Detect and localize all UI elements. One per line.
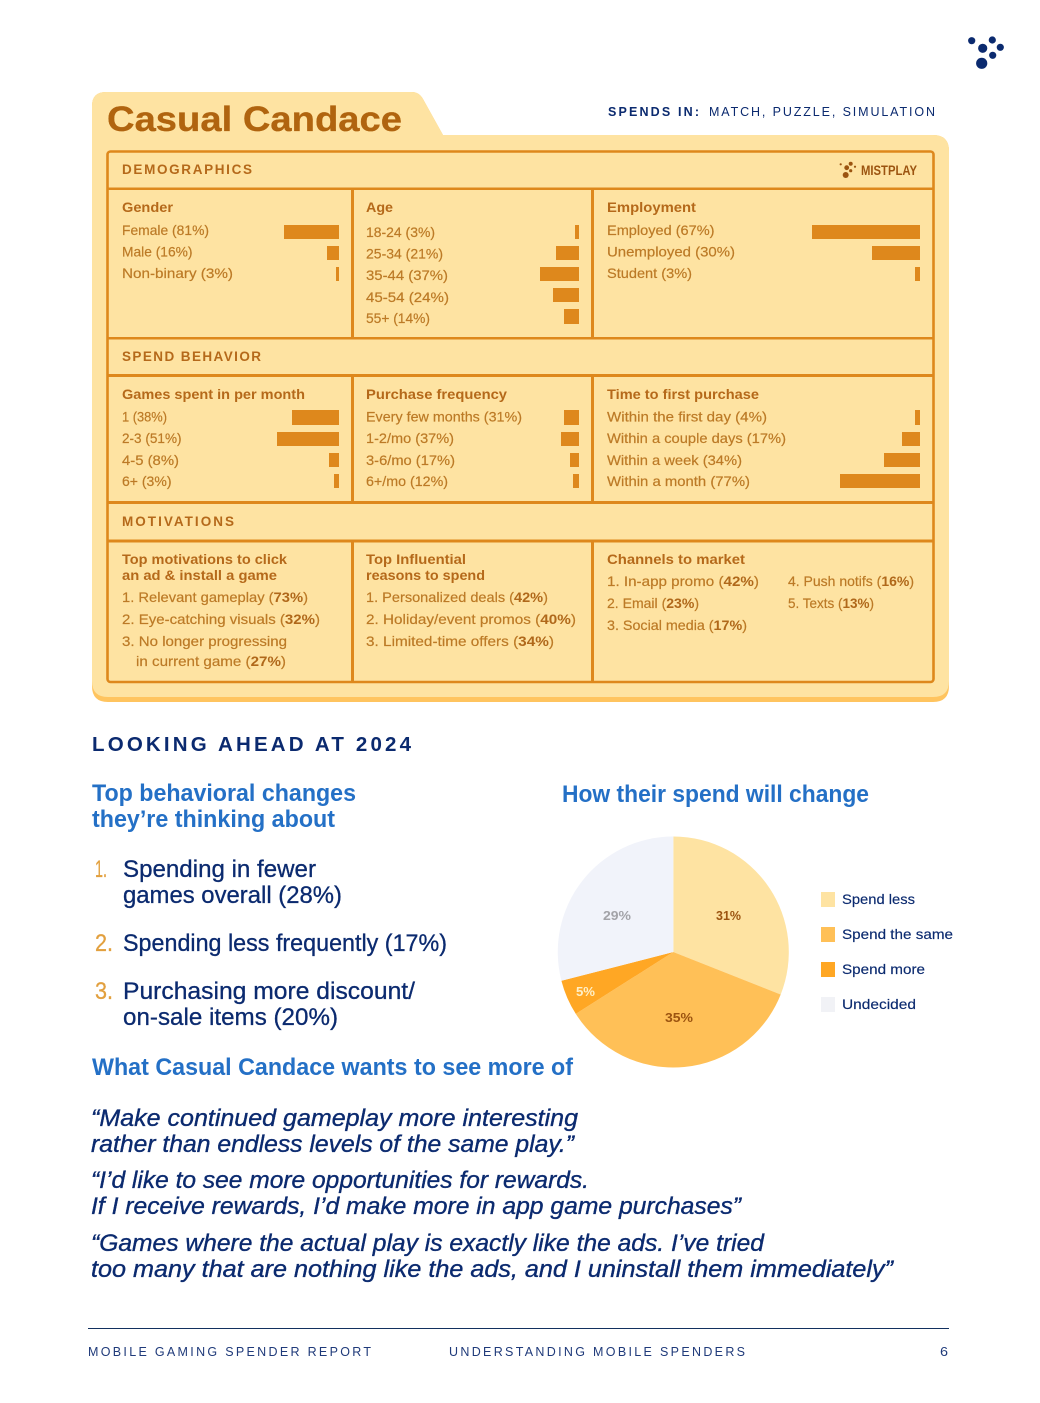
panel: time to first purchase: Within a month (77%) <box>607 473 750 489</box>
panel: time to first purchase: Time to first purchase <box>607 386 759 402</box>
quote 2: If I receive rewards, I’d make more in app game purchases” <box>91 1193 743 1220</box>
panel: games spent in per month: Games spent in per month <box>122 386 305 402</box>
list: behavioral changes: Purchasing more discount/ <box>123 978 415 1005</box>
panel: influential reasons: reasons to spend <box>366 567 485 583</box>
panel: employment: Student (3%) <box>607 265 692 281</box>
list: behavioral changes <box>95 856 447 1031</box>
panel: top motivations: Top motivations to click <box>122 551 287 567</box>
legend: Spend the same <box>842 926 953 942</box>
heading: top behavioral changes: they’re thinking about <box>92 806 335 833</box>
spends in line <box>608 105 935 119</box>
panel: age: 25-34 (21%) <box>366 246 443 262</box>
panel: influential reasons: 3. Limited-time offers ( 34%) <box>366 633 554 649</box>
panel: time to first purchase: Within a couple days (17%) <box>607 430 786 446</box>
panel: purchase frequency <box>366 386 579 489</box>
pie chart: spend change: 29% <box>603 908 631 923</box>
panel: top motivations: 3. No longer progressing <box>122 633 287 649</box>
heading: how their spend will change: How their spend will change <box>562 781 869 808</box>
panel: gender: Male (16%) <box>122 244 192 260</box>
panel: age: 45-54 (24%) <box>366 289 449 305</box>
list: behavioral changes: 2. <box>95 930 113 957</box>
legend <box>821 891 953 1012</box>
quote 3: too many that are nothing like the ads, and I uninstall them immediately” <box>91 1256 895 1283</box>
quote 1 <box>91 1105 578 1158</box>
list: behavioral changes: 1. <box>95 856 107 883</box>
panel: purchase frequency: Every few months (31%) <box>366 408 522 424</box>
card background folder <box>92 92 949 702</box>
panel: channels to market: 1. In-app promo ( 42%) <box>607 573 759 589</box>
list: behavioral changes: Spending less frequently (17%) <box>123 930 447 957</box>
quote 1: “Make continued gameplay more interesting <box>91 1105 578 1132</box>
panel: channels to market: 4. Push notifs (16%) <box>788 573 914 589</box>
panel: games spent in per month <box>122 386 339 489</box>
panel: age <box>366 199 579 326</box>
panel: channels to market: 5. Texts (13%) <box>788 595 874 611</box>
panel: employment: Employed (67%) <box>607 222 714 238</box>
quote 3: “Games where the actual play is exactly like the ads. I’ve tried <box>91 1230 765 1257</box>
list: behavioral changes: on-sale items (20%) <box>123 1004 338 1031</box>
title: Casual Candace <box>107 100 402 139</box>
panel: games spent in per month: 1 (38%) <box>122 408 167 424</box>
heading: motivations: MOTIVATIONS <box>122 514 234 529</box>
heading: demographics: DEMOGRAPHICS <box>122 162 252 177</box>
pie chart: spend change <box>558 836 789 1067</box>
spends in line: MATCH, PUZZLE, SIMULATION <box>709 105 935 119</box>
table grid <box>107 152 934 682</box>
panel: top motivations: 2. Eye-catching visuals ( 32%) <box>122 611 320 627</box>
panel: age: 18-24 (3%) <box>366 224 435 240</box>
panel: purchase frequency: 1-2/mo (37%) <box>366 430 454 446</box>
panel: channels to market: 3. Social media (17%) <box>607 617 747 633</box>
heading: top behavioral changes: Top behavioral changes <box>92 780 356 807</box>
panel: influential reasons: Top Influential <box>366 551 466 567</box>
quote 1: rather than endless levels of the same play.” <box>91 1131 576 1158</box>
panel: gender: Non-binary (3%) <box>122 265 233 281</box>
section heading: looking ahead: LOOKING AHEAD AT 2024 <box>92 733 412 756</box>
panel: employment <box>607 199 920 281</box>
panel: games spent in per month: 4-5 (8%) <box>122 452 179 468</box>
panel: top motivations: an ad & install a game <box>122 567 277 583</box>
panel: top motivations: in current game ( 27%) <box>136 653 286 669</box>
legend: Undecided <box>842 996 916 1012</box>
panel: employment: Unemployed (30%) <box>607 244 735 260</box>
quote 2 <box>91 1167 743 1220</box>
panel: games spent in per month: 6+ (3%) <box>122 473 172 489</box>
footer: MOBILE GAMING SPENDER REPORT <box>88 1345 371 1359</box>
panel: age: Age <box>366 199 393 215</box>
panel: time to first purchase <box>607 386 920 489</box>
panel: gender: Female (81%) <box>122 222 209 238</box>
panel: employment: Employment <box>607 199 696 215</box>
panel: channels to market: 2. Email (23%) <box>607 595 699 611</box>
icon: Mistplay wordmark <box>840 162 917 178</box>
footer: UNDERSTANDING MOBILE SPENDERS <box>449 1345 745 1359</box>
panel: time to first purchase: Within a week (34%) <box>607 452 742 468</box>
heading: wants to see more of: What Casual Candace wants to see more of <box>92 1054 574 1081</box>
icon: Mistplay dots logo <box>968 36 1004 69</box>
footer: 6 <box>940 1345 948 1359</box>
pie chart: spend change: 35% <box>665 1010 693 1025</box>
panel: gender: Gender <box>122 199 174 215</box>
panel: influential reasons: 2. Holiday/event promos ( 40%) <box>366 611 576 627</box>
panel: persona card <box>92 92 949 702</box>
panel: gender <box>122 199 339 281</box>
panel: games spent in per month: 2-3 (51%) <box>122 430 182 446</box>
icon: Mistplay wordmark: MISTPLAY <box>861 163 917 178</box>
heading: top behavioral changes <box>92 780 356 833</box>
list: behavioral changes: Spending in fewer <box>123 856 316 883</box>
spends in line: SPENDS IN: <box>608 105 699 119</box>
panel: top motivations: 1. Relevant gameplay ( 73%) <box>122 589 308 605</box>
panel: purchase frequency: 6+/mo (12%) <box>366 473 448 489</box>
pie chart: spend change: 5% <box>576 984 595 999</box>
panel: age: 55+ (14%) <box>366 310 430 326</box>
panel: time to first purchase: Within the first day (4%) <box>607 408 767 424</box>
panel: age: 35-44 (37%) <box>366 267 448 283</box>
quote 2: “I’d like to see more opportunities for rewards. <box>91 1167 589 1194</box>
footer <box>88 1328 949 1359</box>
heading: spend behavior: SPEND BEHAVIOR <box>122 349 261 364</box>
panel: purchase frequency: 3-6/mo (17%) <box>366 452 455 468</box>
legend: Spend more <box>842 961 925 977</box>
panel: channels to market: Channels to market <box>607 551 745 567</box>
quote 3 <box>91 1230 895 1283</box>
legend: Spend less <box>842 891 915 907</box>
panel: influential reasons <box>366 551 576 649</box>
panel: purchase frequency: Purchase frequency <box>366 386 507 402</box>
list: behavioral changes: games overall (28%) <box>123 882 342 909</box>
panel: channels to market <box>607 551 914 633</box>
list: behavioral changes: 3. <box>95 978 113 1005</box>
pie chart: spend change: 31% <box>716 908 741 923</box>
panel: top motivations <box>122 551 320 669</box>
panel: influential reasons: 1. Personalized deals ( 42%) <box>366 589 548 605</box>
